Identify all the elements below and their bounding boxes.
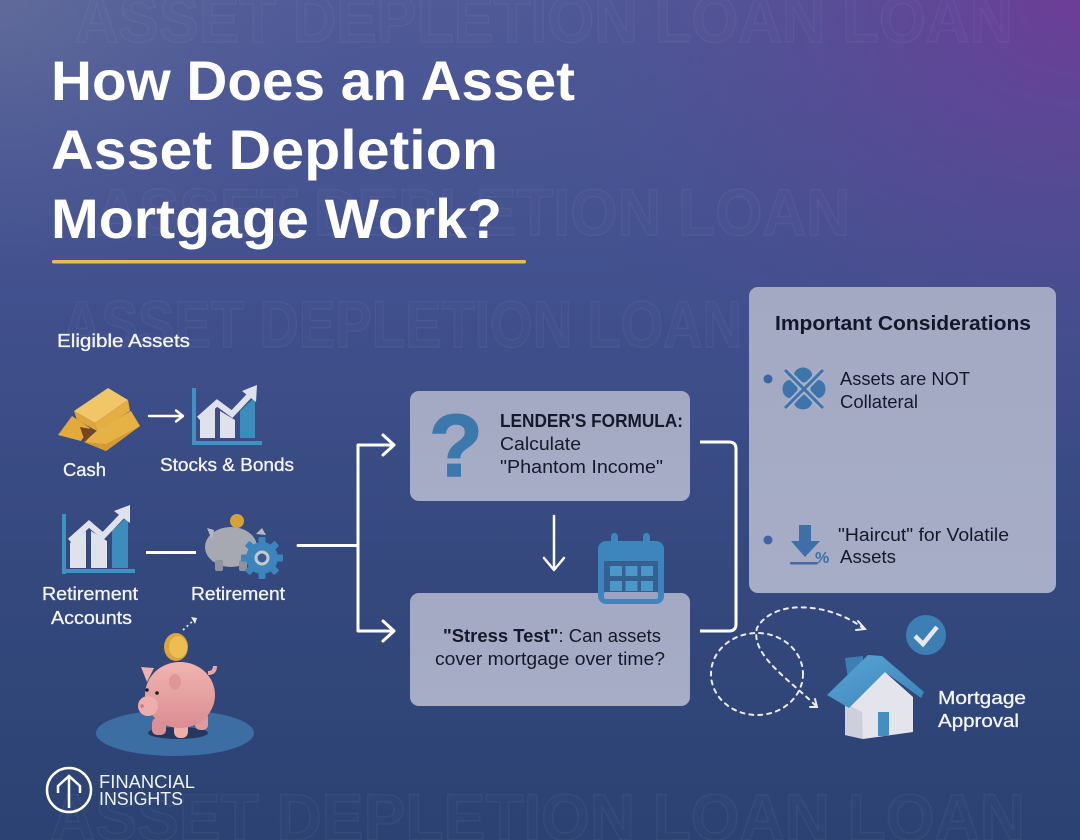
panel: lender's formula: Calculate (500, 434, 581, 454)
panel: lender's formula: LENDER'S FORMULA: (500, 411, 683, 431)
panel: stress test (410, 593, 690, 706)
icon: stocks chart (192, 385, 262, 445)
logo mark (47, 768, 91, 812)
icon: calendar (598, 533, 664, 604)
line: retirement accounts to retirement (146, 551, 196, 554)
heading: eligible assets: Eligible Assets (57, 331, 190, 351)
label: retirement: Retirement (191, 584, 285, 604)
watermark text: ASSET DEPLETION LOAN (95, 175, 850, 249)
item: haircut: "Haircut" for Volatile (838, 525, 1009, 545)
item: haircut: % (815, 550, 829, 567)
arrow: formula to stress test (544, 516, 564, 570)
icon: retirement chart (62, 505, 135, 574)
panel: important considerations (749, 287, 1056, 593)
item: haircut: Assets (840, 547, 896, 567)
icon: gold bars (58, 388, 140, 451)
icon: question mark: ? (429, 396, 483, 495)
title: Asset Depletion (51, 118, 498, 181)
icon: check badge (906, 615, 946, 655)
label: mortgage approval (938, 688, 1026, 731)
logo: financial insights (47, 768, 195, 812)
connector: process boxes to approval (700, 442, 736, 631)
title underline (52, 260, 526, 264)
label: retirement accounts: Accounts (51, 608, 132, 628)
panel: lender's formula (410, 391, 690, 501)
item: haircut (764, 525, 1009, 567)
label: retirement accounts (42, 584, 138, 628)
dashed loop arrows (711, 607, 865, 715)
heading: Important Considerations (775, 313, 1031, 335)
logo text: INSIGHTS (99, 789, 183, 809)
logo text (99, 772, 195, 809)
label: mortgage approval: Approval (938, 711, 1019, 731)
logo text: FINANCIAL (99, 772, 195, 792)
label: stocks and bonds: Stocks & Bonds (160, 455, 294, 475)
label: mortgage approval: Mortgage (938, 688, 1026, 708)
connector: assets to process boxes (298, 435, 394, 641)
panel: lender's formula: "Phantom Income" (500, 457, 663, 477)
panel: stress test: "Stress Test": Can assets (443, 626, 661, 646)
title: Mortgage Work? (51, 187, 502, 250)
title (51, 49, 575, 250)
icon: grey piggy bank with gear (205, 514, 283, 579)
label: cash: Cash (63, 460, 106, 480)
title: How Does an Asset (51, 49, 575, 112)
panel: stress test: cover mortgage over time? (435, 649, 665, 669)
arrow: cash to stocks (149, 410, 183, 422)
icon: house (827, 655, 924, 739)
label: retirement accounts: Retirement (42, 584, 138, 604)
watermark text: ASSET DEPLETION LOAN (62, 287, 742, 361)
item: not collateral: Collateral (840, 392, 918, 412)
icon: pink piggy bank (96, 617, 254, 756)
item: not collateral: Assets are NOT (840, 369, 970, 389)
item: not collateral (764, 368, 970, 412)
